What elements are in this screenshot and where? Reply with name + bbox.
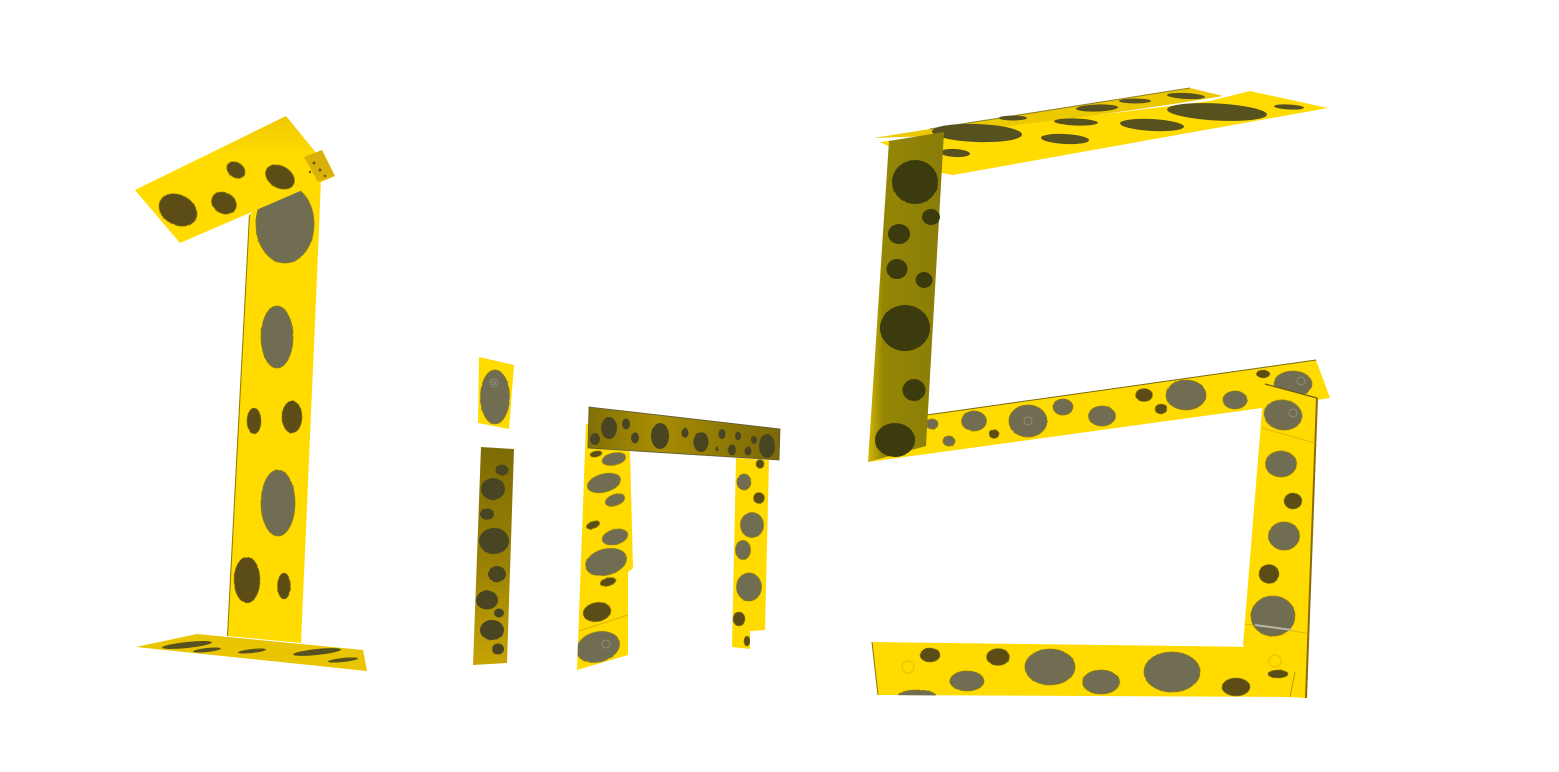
artwork: 1 in 5 built from yellow perforated strips [135,88,1330,698]
digit 1 [135,116,367,671]
letter i dot [478,357,514,429]
letter n [573,407,780,670]
digit 1 stem [227,150,322,643]
letter n right leg [732,458,769,649]
letter i [473,357,514,665]
digit 5 middle bar [868,360,1330,462]
digit 5 top bar [873,88,1328,175]
letter n left leg [573,423,633,670]
digit 5 [868,88,1330,702]
letter i stem [473,447,514,665]
digit 1 base [136,634,367,671]
digit 5 bottom bar [872,642,1290,702]
letter n crossbar [588,407,780,460]
digit 1 flag [135,116,335,243]
digit 5 left vertical [868,132,944,462]
digit 5 right vertical [1243,384,1317,698]
